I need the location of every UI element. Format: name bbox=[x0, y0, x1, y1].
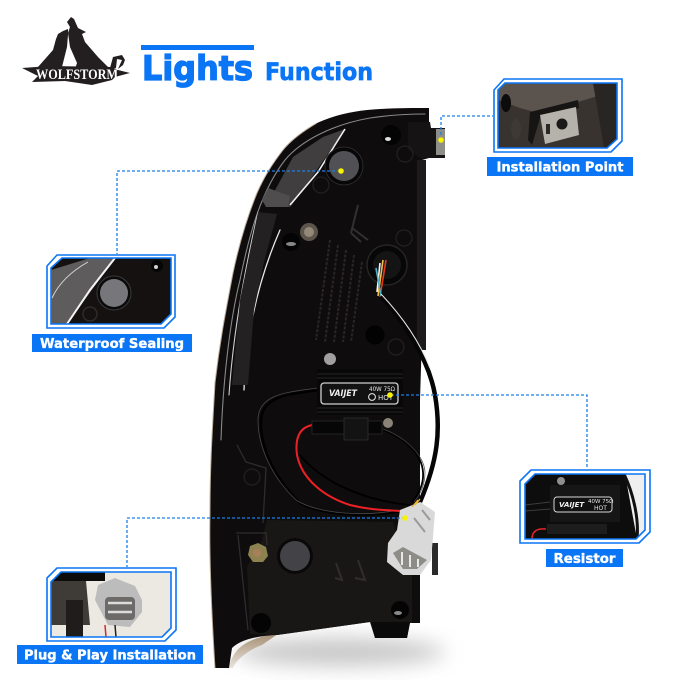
resistor block: VAIJET bbox=[329, 389, 358, 399]
wire bundle colours bbox=[376, 260, 386, 297]
mounting tab bbox=[408, 122, 445, 158]
return wire highlight bbox=[383, 429, 425, 502]
tail light rear view bbox=[210, 108, 445, 668]
foot bracket bbox=[372, 622, 410, 638]
lower brass nut bbox=[248, 543, 268, 562]
callout photo: HOT bbox=[594, 505, 607, 512]
leader line: installation point bbox=[441, 116, 493, 140]
logo: Wolfstorm bbox=[22, 17, 130, 85]
hole left bbox=[282, 233, 300, 251]
red wire bbox=[296, 425, 402, 511]
callout frame bbox=[494, 79, 622, 152]
heading: Lights Function: Function bbox=[265, 58, 373, 86]
callout frame bbox=[47, 568, 176, 641]
callout label bbox=[546, 549, 623, 567]
title bar accent bbox=[141, 45, 254, 50]
callout photo outline bbox=[51, 258, 171, 324]
white plug bbox=[387, 499, 438, 575]
logo wordmark: WOLFSTORM bbox=[36, 67, 118, 83]
lens panel highlight bbox=[290, 129, 345, 205]
yellow dots bbox=[338, 137, 444, 521]
embossed logo bbox=[351, 205, 368, 242]
wire grommet hole bbox=[367, 245, 407, 285]
lower holes bbox=[251, 601, 409, 633]
resistor block: HOT bbox=[378, 394, 394, 402]
housing edge highlight bbox=[210, 123, 317, 668]
floor shadow bbox=[235, 638, 445, 666]
callout photo bbox=[51, 572, 171, 637]
callout photo: VAIJET bbox=[559, 501, 585, 509]
main cable bbox=[381, 296, 438, 502]
lower grommet bbox=[277, 538, 313, 574]
resistor wires bbox=[261, 390, 400, 515]
upper grommet bbox=[325, 147, 363, 185]
callout: waterproof sealing bbox=[32, 255, 192, 352]
inline connector bbox=[312, 418, 393, 440]
wolf tail bbox=[110, 55, 125, 69]
resistor block bbox=[317, 369, 403, 415]
bottom plate bbox=[247, 520, 412, 635]
callout: plug and play installation bbox=[17, 568, 203, 664]
callout label text: Plug & Play Installation bbox=[24, 648, 196, 664]
callout photo: 40W 75Ω bbox=[588, 499, 613, 505]
callout frame bbox=[520, 470, 650, 543]
leader line: resistor bbox=[391, 395, 587, 469]
resistor block: 40W 75Ω bbox=[369, 385, 395, 393]
upper lens strip bbox=[262, 188, 290, 207]
tan crescent under housing bbox=[229, 634, 278, 668]
raised channel outline bbox=[236, 445, 267, 630]
callout photo outline bbox=[525, 474, 645, 539]
leader line: plug bbox=[127, 518, 405, 567]
black return wire bbox=[300, 430, 423, 505]
callout label bbox=[32, 334, 192, 352]
cable highlight bbox=[381, 294, 430, 368]
callout label bbox=[487, 157, 633, 176]
mounting hole top bbox=[381, 125, 401, 145]
heading: Lights Function bbox=[142, 49, 373, 89]
callout photo outline bbox=[51, 572, 171, 637]
ghost circles bbox=[244, 146, 413, 544]
callout: resistor bbox=[520, 470, 650, 567]
side strip bbox=[417, 160, 426, 350]
callout photo bbox=[51, 258, 171, 324]
callout label bbox=[17, 645, 203, 664]
mounting clip bbox=[436, 129, 445, 155]
callout frame bbox=[47, 255, 175, 328]
lower lens strip bbox=[232, 212, 277, 385]
resistor wires highlight bbox=[258, 388, 398, 514]
callout: installation point bbox=[487, 79, 633, 176]
callout photo bbox=[525, 474, 645, 539]
smoked lens panel bbox=[266, 129, 345, 207]
callout label text: Resistor bbox=[554, 551, 616, 567]
leader line: waterproof sealing bbox=[117, 171, 340, 254]
callout photo bbox=[498, 83, 617, 148]
embossed marks bbox=[335, 560, 365, 580]
lower round hole bbox=[366, 326, 384, 344]
callout label text: Installation Point bbox=[496, 160, 624, 176]
lamp housing bbox=[210, 108, 429, 668]
callout label text: Waterproof Sealing bbox=[40, 336, 184, 352]
small wolf bbox=[38, 29, 68, 67]
resistor screw bbox=[324, 353, 336, 365]
lens reflections bbox=[221, 114, 425, 440]
mounting bolt bbox=[300, 223, 318, 241]
logo base bbox=[22, 66, 130, 85]
heading: Lights Function: Lights bbox=[142, 49, 253, 89]
embossed text bbox=[316, 240, 362, 342]
callout photo outline bbox=[498, 83, 617, 148]
big wolf bbox=[67, 17, 110, 69]
